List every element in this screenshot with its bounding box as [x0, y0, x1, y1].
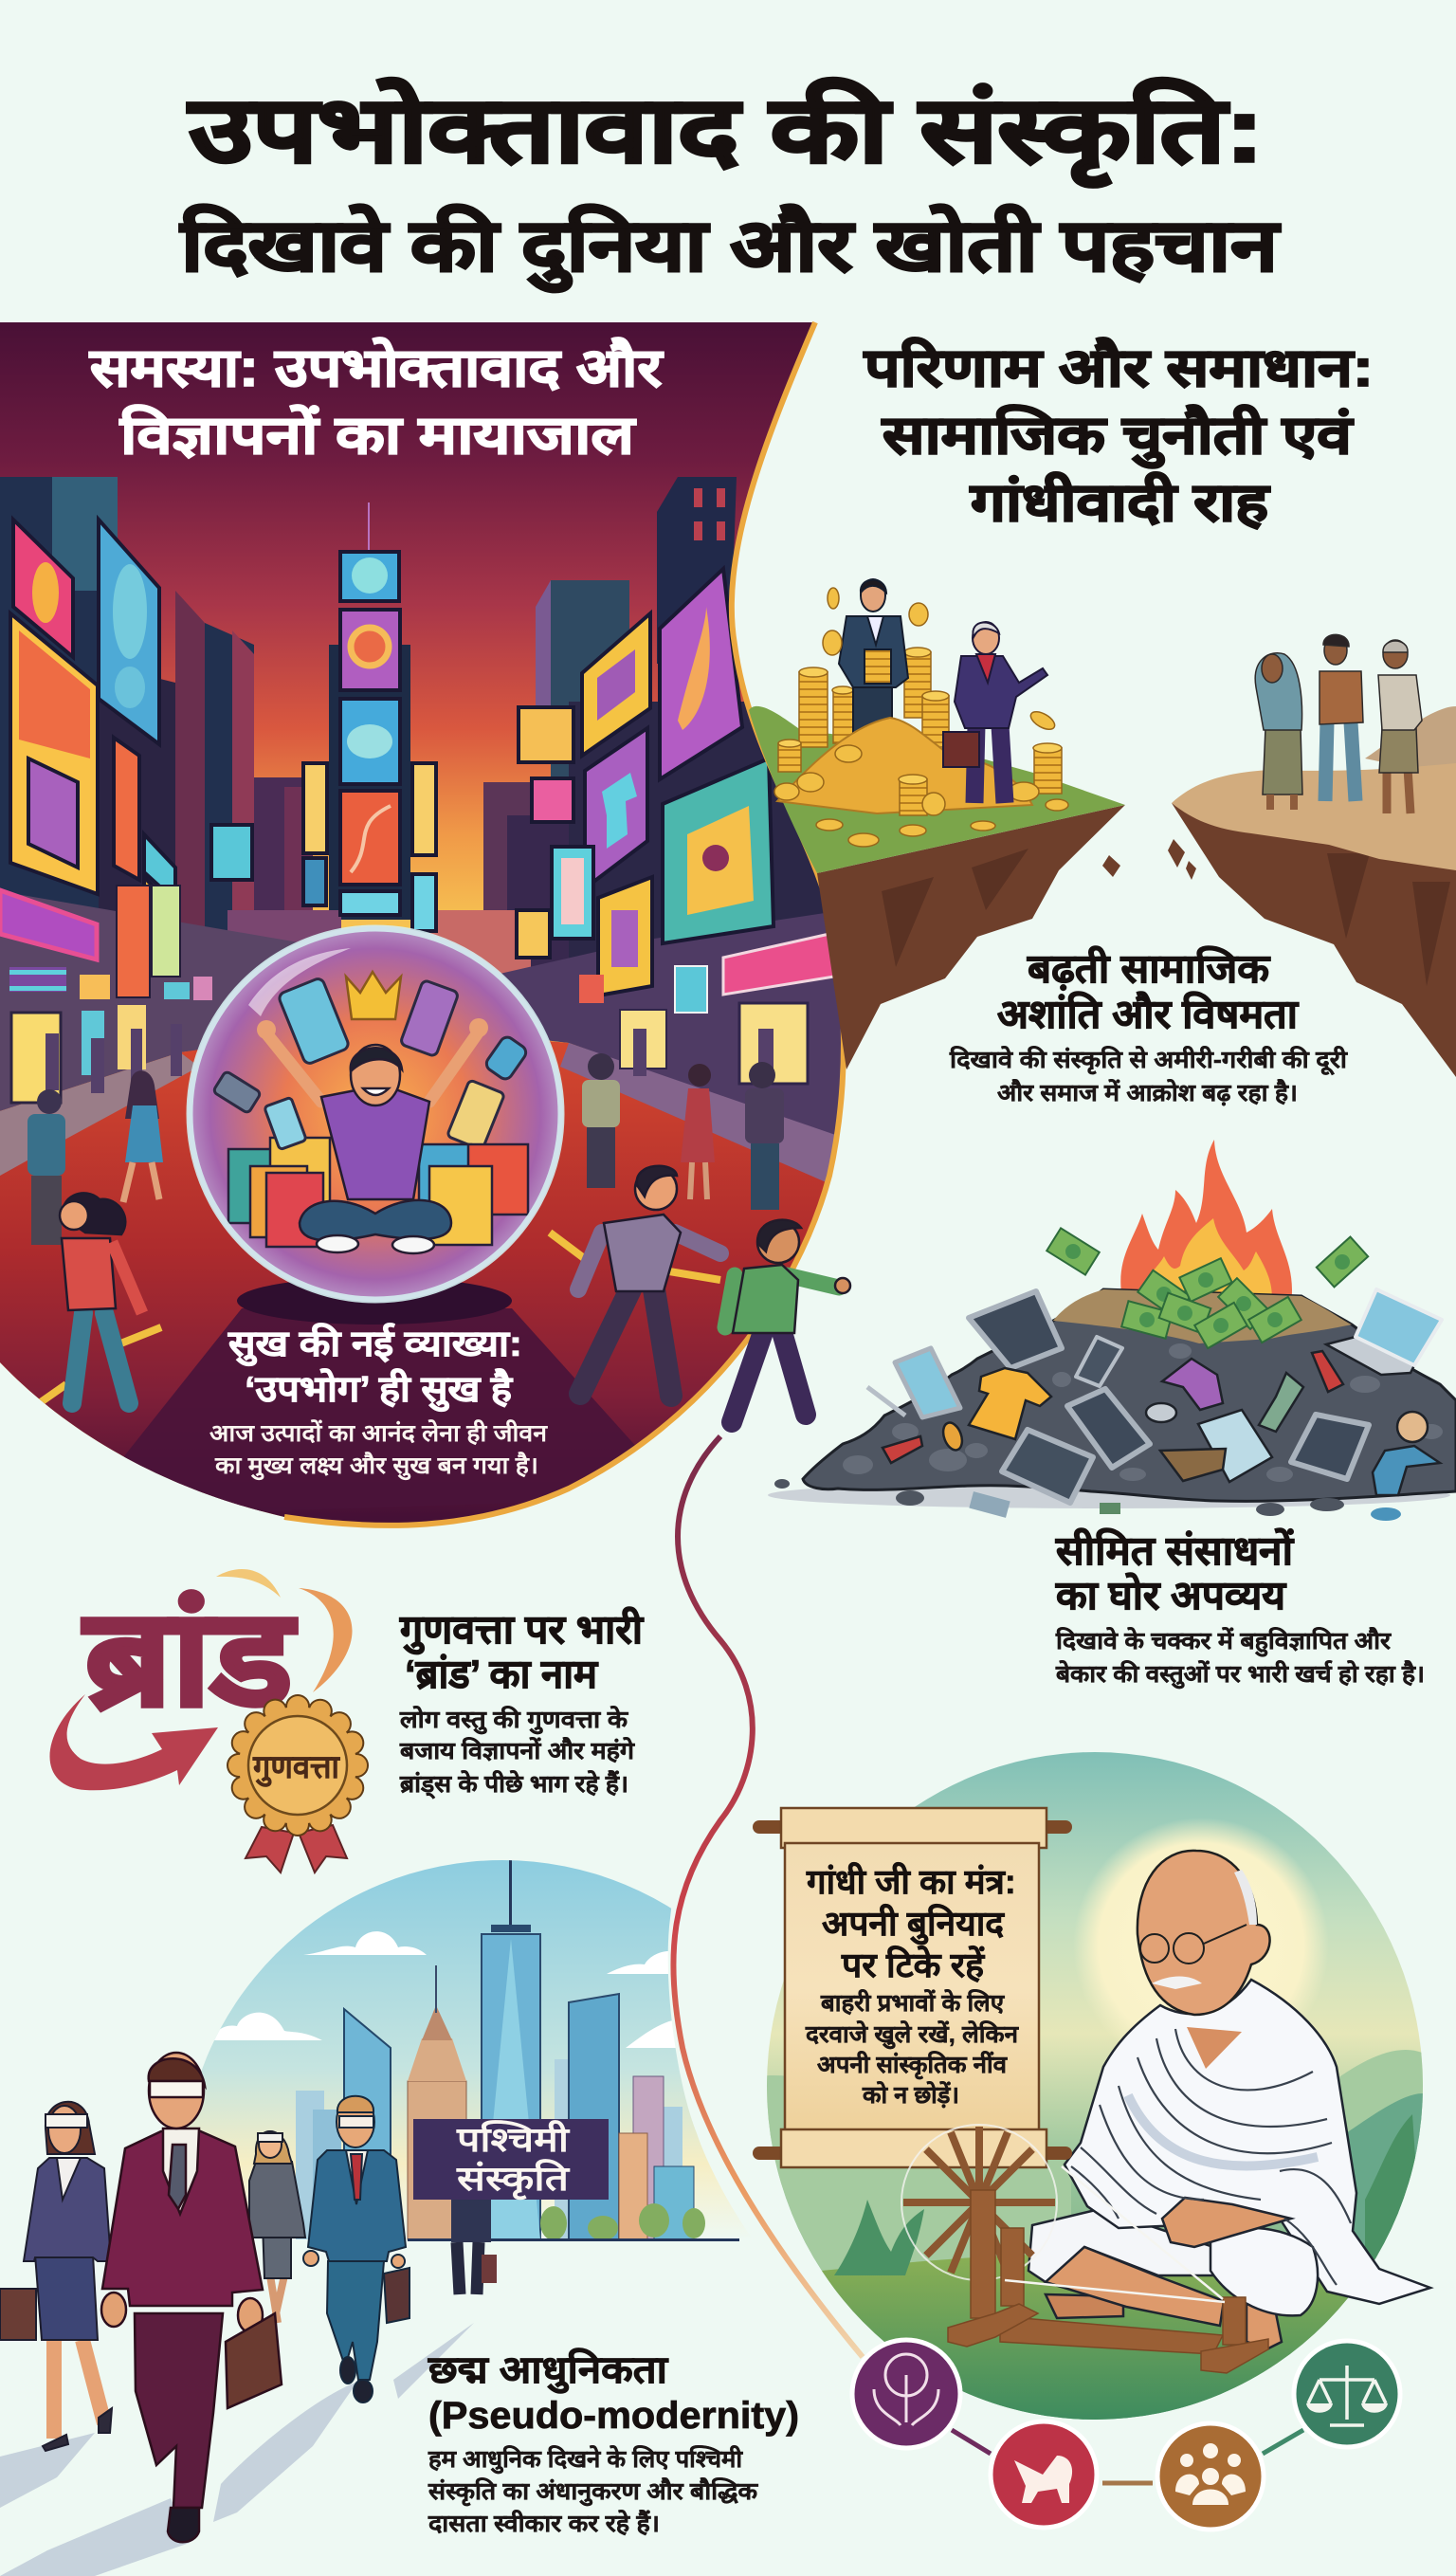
- text: brand over quality: बजाय विज्ञापनों और महंगे: [399, 1737, 635, 1764]
- grey woman: [249, 2131, 305, 2323]
- bubble with happy consumer: [188, 926, 563, 1302]
- title: दिखावे की दुनिया और खोती पहचान: [179, 204, 1281, 293]
- discarded gadgets and clothes: [867, 1289, 1442, 1503]
- shopping bags left: [228, 1138, 330, 1247]
- right cliff: [1172, 803, 1456, 1077]
- right heading: परिणाम और समाधान:: [864, 337, 1374, 397]
- illustration: brand logo and quality medal: ब्रांड: [82, 1583, 297, 1732]
- title: [179, 78, 1281, 293]
- rubble bumps: [843, 1343, 1443, 1482]
- running man leaving panel: [725, 1220, 850, 1422]
- scroll: दरवाजे खुले रखें, लेकिन: [805, 2020, 1019, 2050]
- right bags: [419, 1144, 528, 1245]
- text: waste of limited resources: बेकार की वस्तुओं पर भारी खर्च हो रहा है।: [1055, 1660, 1425, 1690]
- icon: hands and tree: [852, 2340, 960, 2448]
- icon: lion: [991, 2421, 1097, 2528]
- loose coins: [774, 588, 1068, 847]
- left cliff: [817, 805, 1125, 1069]
- blue man: [303, 2096, 410, 2402]
- text: pseudo-modernity: दासता स्वीकार कर रहे हैं।: [428, 2510, 660, 2537]
- illustration: burning waste heap: [768, 1140, 1456, 1521]
- crown: [346, 972, 401, 1019]
- illustration: brand logo and quality medal: [49, 1569, 356, 1873]
- gadgets: [212, 977, 529, 1150]
- rich man two: [943, 622, 1047, 803]
- small far man: [451, 2181, 497, 2294]
- debris: [1102, 839, 1196, 880]
- left woman: [0, 2102, 112, 2451]
- scroll: गांधी जी का मंत्र:: [806, 1862, 1016, 1901]
- panel: problem - consumerism city: का मुख्य लक्ष्य और सुख बन गया है।: [214, 1452, 538, 1481]
- illustration: western city and blindfolded people: [0, 1858, 853, 2576]
- background pedestrians: [27, 1053, 784, 1245]
- fire: [1120, 1140, 1292, 1304]
- scroll: [753, 1808, 1072, 2167]
- text: pseudo-modernity: छद्म आधुनिकता: [428, 2348, 669, 2394]
- signboard: पश्चिमी: [456, 2120, 571, 2159]
- text: pseudo-modernity: (Pseudo-modernity): [428, 2395, 799, 2437]
- rich man one: [839, 579, 908, 740]
- icon: people: [1157, 2423, 1264, 2530]
- text: waste of limited resources: दिखावे के चक्कर में बहुविज्ञापित और: [1055, 1627, 1392, 1657]
- text: pseudo-modernity: संस्कृति का अंधानुकरण और बौद्धिक: [428, 2477, 759, 2507]
- text: waste of limited resources: का घोर अपव्यय: [1055, 1572, 1287, 1617]
- text: brand over quality: लोग वस्तु की गुणवत्ता के: [399, 1706, 629, 1735]
- heap: [803, 1289, 1456, 1501]
- scroll: अपनी सांस्कृतिक नींव: [817, 2051, 1008, 2080]
- panel: problem - consumerism city: आज उत्पादों का आनंद लेना ही जीवन: [209, 1419, 548, 1447]
- panel: problem - consumerism city: समस्या: उपभोक्तावाद और: [89, 337, 664, 397]
- man: [266, 1032, 479, 1253]
- text: social unrest and inequality: [949, 945, 1349, 1106]
- city buildings: [0, 477, 844, 1142]
- text: brand over quality: ‘ब्रांड’ का नाम: [405, 1652, 599, 1696]
- skyline circle: [187, 1860, 743, 2239]
- storefront windows and signs: [0, 886, 834, 1103]
- text: social unrest and inequality: और समाज में आक्रोश बढ़ रहा है।: [997, 1079, 1298, 1106]
- scroll: अपनी बुनियाद: [822, 1904, 1006, 1946]
- medal: [239, 1707, 356, 1873]
- right heading: [864, 337, 1374, 532]
- head: [1138, 1851, 1270, 2015]
- road and sidewalks: [0, 1032, 844, 1536]
- shadows: [0, 2323, 474, 2576]
- text: pseudo-modernity: हम आधुनिक दिखने के लिए पश्चिमी: [428, 2445, 744, 2475]
- panel: problem - consumerism city: सुख की नई व्याख्या:: [228, 1323, 522, 1366]
- robe and body: [1028, 1980, 1430, 2348]
- illustration: inequality cliffs: [749, 579, 1456, 1077]
- icon: scales: [1294, 2341, 1400, 2447]
- text: brand over quality: गुणवत्ता पर भारी: [399, 1606, 645, 1654]
- billboards: [10, 520, 774, 996]
- panel: problem - consumerism city: [0, 322, 853, 1536]
- gold pile: [777, 718, 1032, 813]
- red arrow: [49, 1694, 218, 1790]
- text: social unrest and inequality: अशांति और विषमता: [997, 991, 1300, 1036]
- right heading: सामाजिक चुनौती एवं: [882, 404, 1354, 468]
- signboard: [413, 2119, 609, 2201]
- icon row: values: [852, 2340, 1400, 2530]
- illustration: Gandhi with charkha: [753, 1749, 1431, 2427]
- maroon suit man: [101, 2053, 282, 2542]
- panel: problem - consumerism city: विज्ञापनों का मायाजाल: [119, 404, 636, 465]
- foreground pedestrians: [60, 1166, 720, 1403]
- panel: problem - consumerism city: ‘उपभोग’ ही सुख है: [245, 1368, 514, 1412]
- scroll: पर टिके रहें: [841, 1946, 986, 1984]
- money pile: [1046, 1228, 1368, 1348]
- connector thread: [673, 1436, 863, 2357]
- text: social unrest and inequality: बढ़ती सामाजिक: [1027, 945, 1271, 991]
- signboard: संस्कृति: [456, 2159, 571, 2201]
- text: waste of limited resources: [1055, 1527, 1425, 1690]
- right heading: गांधीवादी राह: [970, 471, 1271, 532]
- medal: गुणवत्ता: [252, 1749, 340, 1787]
- scroll: बाहरी प्रभावों के लिए: [820, 1989, 1005, 2017]
- title: उपभोक्तावाद की संस्कृति:: [187, 78, 1264, 188]
- scroll: को न छोड़ें।: [862, 2081, 959, 2109]
- text: waste of limited resources: सीमित संसाधनों: [1055, 1527, 1295, 1573]
- text: brand over quality: [399, 1606, 645, 1799]
- coin stacks back: [799, 648, 949, 747]
- text: brand over quality: ब्रांड्स के पीछे भाग रहे हैं।: [399, 1770, 628, 1799]
- charkha: [901, 2125, 1268, 2373]
- text: pseudo-modernity: [428, 2348, 799, 2537]
- poor people: [1255, 634, 1422, 813]
- text: social unrest and inequality: दिखावे की संस्कृति से अमीरी-गरीबी की दूरी: [949, 1046, 1349, 1075]
